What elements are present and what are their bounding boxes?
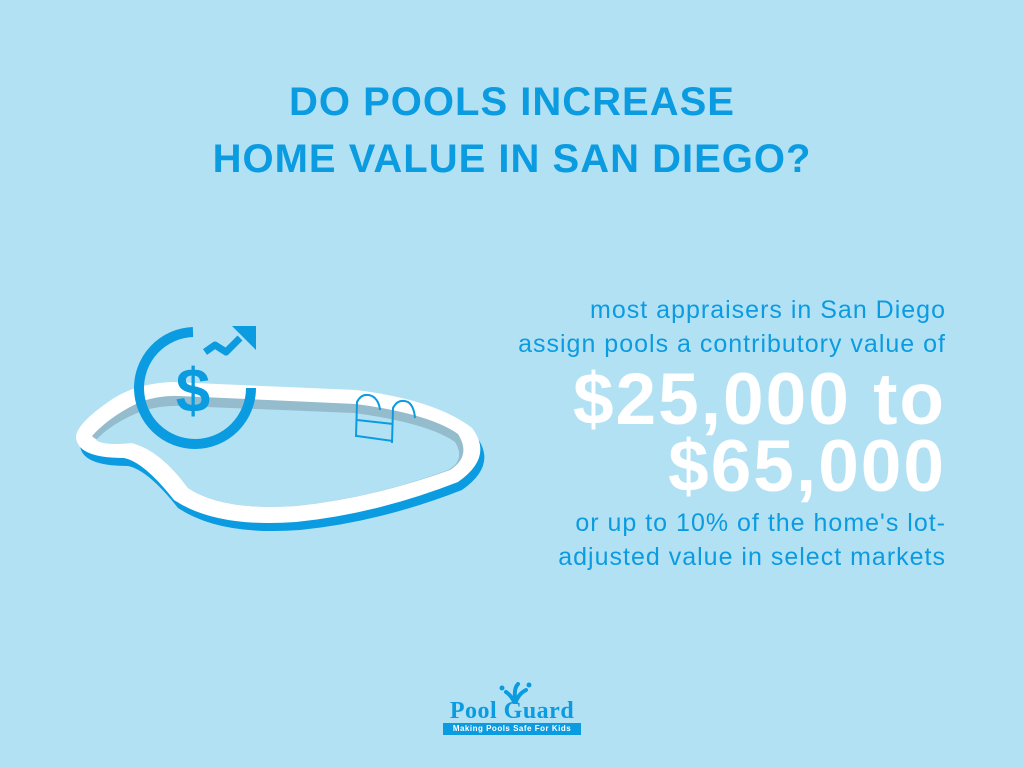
big value: $25,000 to [573, 359, 946, 440]
big value: $65,000 [668, 426, 946, 507]
icon: dollar with rising arrow: $ [176, 357, 210, 426]
logo [443, 682, 581, 735]
text: note [558, 509, 946, 571]
title: HOME VALUE IN SAN DIEGO? [213, 137, 811, 181]
text: note: or up to 10% of the home's lot- [575, 509, 946, 537]
title [213, 80, 811, 181]
text: intro: most appraisers in San Diego [590, 296, 946, 324]
ladder [356, 395, 415, 443]
pool outline [76, 382, 484, 531]
icon: splash [500, 682, 532, 704]
logo: Pool Guard [450, 698, 574, 724]
title: DO POOLS INCREASE [289, 80, 735, 124]
text: note: adjusted value in select markets [558, 543, 946, 571]
text: intro: assign pools a contributory value of [518, 330, 946, 358]
icon: dollar with rising arrow [139, 326, 256, 444]
logo: Making Pools Safe For Kids [453, 724, 571, 733]
text: intro [518, 296, 946, 358]
big value [573, 359, 946, 507]
